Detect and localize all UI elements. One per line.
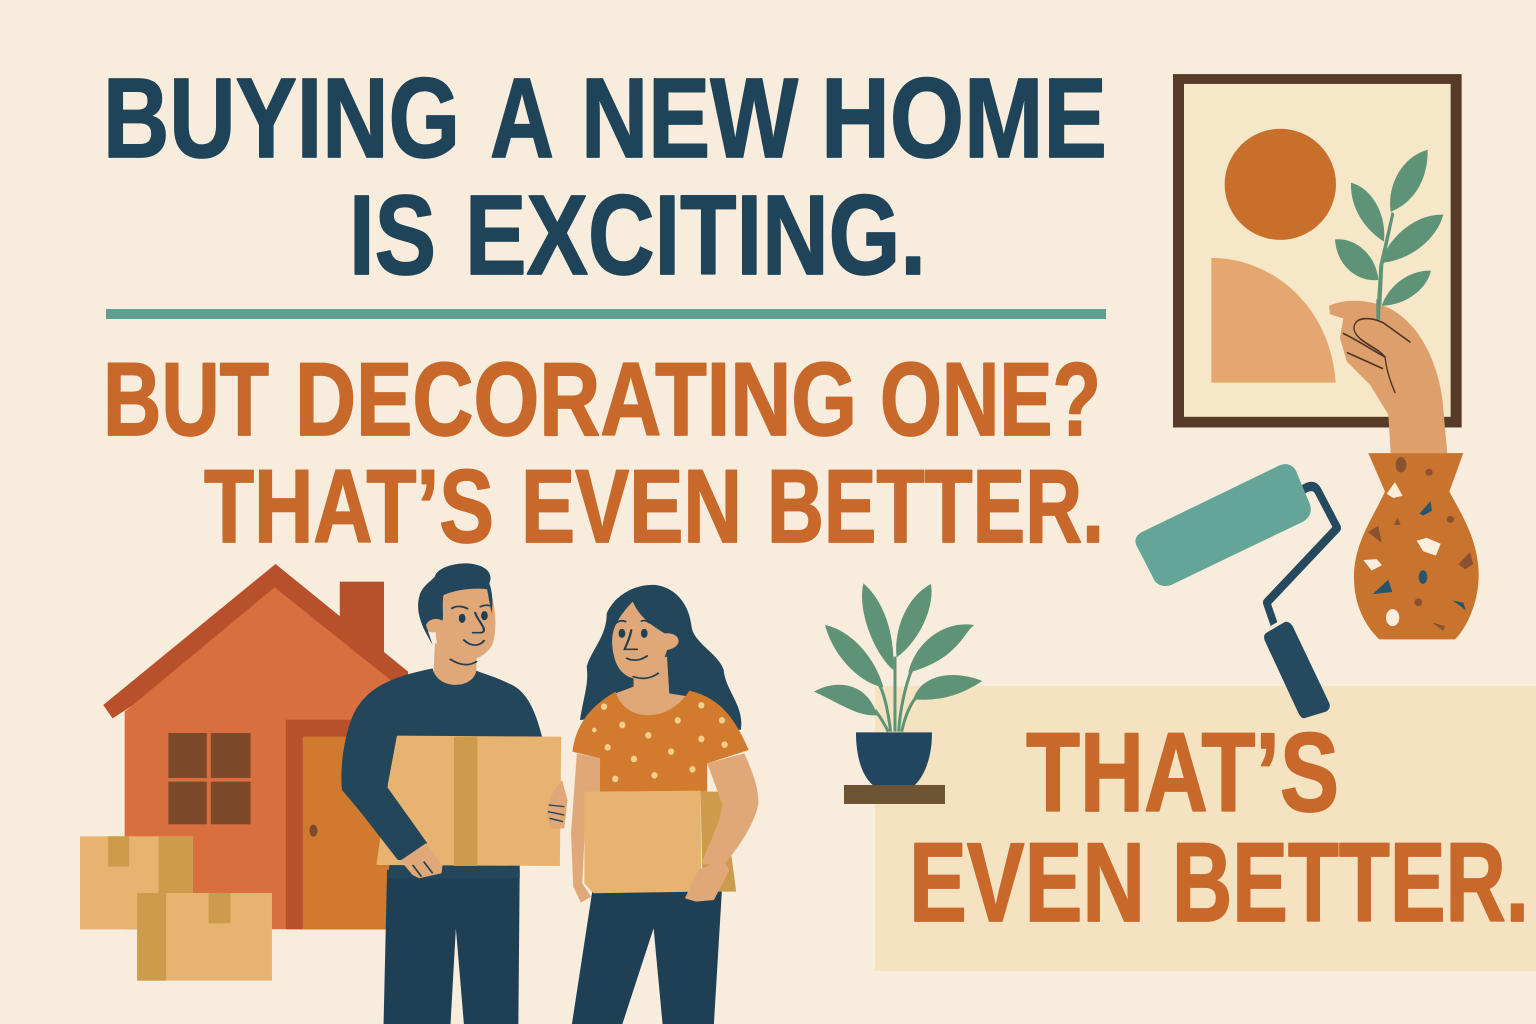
man box — [376, 736, 561, 866]
panel: that's even better background — [875, 686, 1536, 971]
door — [303, 737, 393, 929]
paint roller grip — [1264, 622, 1330, 718]
picture mat — [1184, 84, 1451, 417]
man neck — [433, 643, 476, 697]
hand — [1329, 301, 1447, 453]
plant leaves — [814, 583, 982, 715]
paint roller handle wire — [1267, 486, 1337, 624]
woman left arm — [571, 753, 602, 903]
man left hand — [401, 843, 442, 878]
paint roller sleeve — [1135, 464, 1311, 586]
subtitle: but decorating one: DECORATING — [295, 342, 857, 458]
woman trousers — [572, 890, 722, 1024]
subtitle: but decorating one — [103, 342, 1104, 565]
woman hair — [580, 585, 741, 730]
title: buying a new home: A — [490, 55, 554, 181]
callout: that's even better — [909, 710, 1529, 945]
callout: that's even better: THAT’S — [1026, 710, 1339, 835]
woman hand — [685, 860, 730, 902]
woman face — [612, 602, 679, 678]
vase — [1354, 453, 1479, 639]
vase terrazzo speckles — [1363, 457, 1473, 631]
illustration: woman holding box — [571, 585, 759, 1024]
hand finger lines — [1343, 319, 1410, 392]
woman box back side — [700, 792, 736, 892]
man trousers — [384, 870, 520, 1024]
man face — [436, 585, 495, 662]
door knob — [309, 825, 317, 837]
woman facial features — [615, 621, 658, 678]
subtitle: but decorating one: BUT — [103, 342, 269, 458]
illustration: potted plant on shelf — [814, 583, 982, 804]
man sweater — [341, 668, 542, 878]
house chimney — [340, 582, 384, 682]
door frame — [286, 720, 393, 929]
man right hand — [546, 780, 567, 829]
moving box back — [80, 836, 193, 929]
woman right arm — [701, 753, 759, 867]
sprig in hand — [1335, 150, 1443, 321]
plant stems — [875, 657, 918, 732]
picture frame — [1173, 74, 1462, 427]
subtitle: but decorating one: BETTER. — [767, 449, 1104, 565]
woman box front — [584, 791, 701, 893]
man finger lines — [413, 805, 564, 877]
title: buying a new home — [103, 55, 1107, 298]
art circle — [1225, 129, 1336, 240]
teal divider rule — [106, 309, 1106, 319]
illustration: man holding box — [341, 563, 567, 1024]
house wall — [125, 587, 392, 929]
wooden shelf — [844, 785, 945, 804]
title: buying a new home: IS — [349, 172, 436, 298]
shirt polka dots — [592, 702, 728, 782]
subtitle: but decorating one: EVEN — [521, 449, 742, 565]
title: buying a new home: BUYING — [103, 55, 460, 181]
man facial features — [451, 605, 489, 665]
illustration: framed art, hand, vase and roller — [1135, 74, 1479, 718]
man ear — [424, 618, 442, 632]
subtitle: but decorating one: THAT’S — [204, 449, 494, 565]
subtitle: but decorating one: ONE? — [880, 342, 1101, 458]
sprig stem over hand — [1376, 299, 1380, 320]
man hair — [418, 563, 492, 645]
illustration: house with boxes — [80, 564, 408, 981]
plant pot — [856, 732, 932, 785]
moving box front — [137, 893, 272, 981]
title: buying a new home: NEW — [581, 55, 798, 181]
woman shirt — [572, 691, 749, 792]
art arch — [1211, 258, 1336, 383]
callout: that's even better: EVEN — [909, 820, 1145, 945]
title: buying a new home: HOME — [821, 55, 1107, 181]
title: buying a new home: EXCITING. — [465, 172, 926, 298]
house roof — [103, 564, 408, 718]
window — [168, 733, 251, 824]
man sleeve over box — [342, 785, 427, 860]
woman neck — [616, 657, 689, 737]
man box tape — [454, 737, 477, 866]
